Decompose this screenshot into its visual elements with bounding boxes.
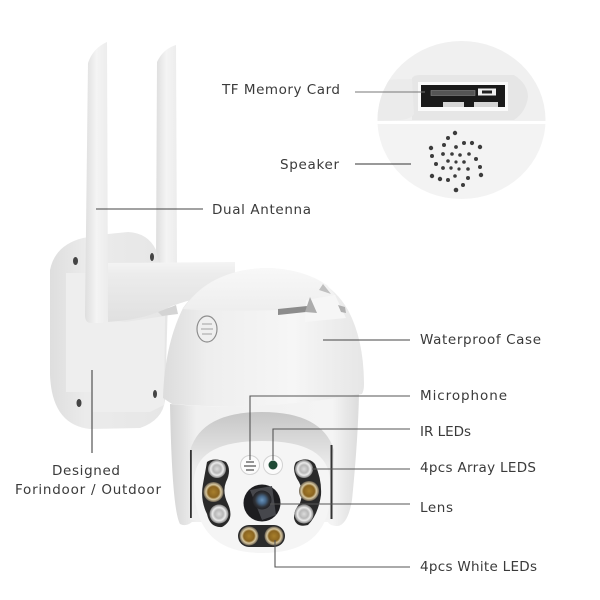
label: IR LEDs: IR LEDs (420, 424, 471, 440)
bottom LED pair (238, 525, 285, 547)
lower housing (170, 394, 359, 526)
left LED array (202, 460, 230, 527)
label: 4pcs Array LEDS: 4pcs Array LEDS (420, 460, 536, 476)
lens (244, 484, 280, 522)
arm underside tab (158, 305, 178, 316)
tray tab (370, 79, 414, 121)
card tray (412, 75, 528, 120)
label: Designed For indoor / Outdoor: Designed (52, 463, 120, 479)
dome vent (278, 284, 346, 322)
inset bottom half (378, 124, 546, 199)
label: TF Memory Card: TF Memory Card (221, 82, 340, 98)
back antenna (156, 45, 177, 264)
mount arm (108, 262, 235, 322)
dome button (197, 316, 217, 342)
label: Waterproof Case: Waterproof Case (420, 332, 541, 348)
camera illustration (50, 42, 364, 553)
microphone (240, 456, 260, 474)
label: Microphone: Microphone (420, 388, 507, 404)
label: 4pcs White LEDs: 4pcs White LEDs (420, 559, 537, 575)
card slot (421, 85, 505, 107)
face cowl (189, 412, 334, 520)
mount screw holes (73, 253, 157, 407)
card frame (418, 82, 508, 111)
IR sensor (264, 456, 282, 474)
inset top half (378, 41, 546, 121)
dome (163, 268, 364, 406)
dome upper cap (183, 268, 336, 311)
side slits (190, 445, 332, 519)
right LED array (294, 459, 321, 526)
detail inset: memory card and speaker (370, 41, 546, 199)
label: Designed For indoor / Outdoor (15, 463, 161, 498)
label: Lens: Lens (420, 500, 453, 516)
label: Designed For indoor / Outdoor: Forindoor / Outdoor (15, 482, 161, 498)
callout lines (92, 92, 425, 567)
camera face (194, 441, 330, 553)
front antenna (85, 42, 108, 323)
label: Speaker: Speaker (280, 157, 339, 173)
label: Dual Antenna: Dual Antenna (212, 202, 311, 218)
speaker holes (429, 131, 483, 192)
mount inner panel (66, 273, 165, 412)
wall mount plate (50, 232, 168, 429)
